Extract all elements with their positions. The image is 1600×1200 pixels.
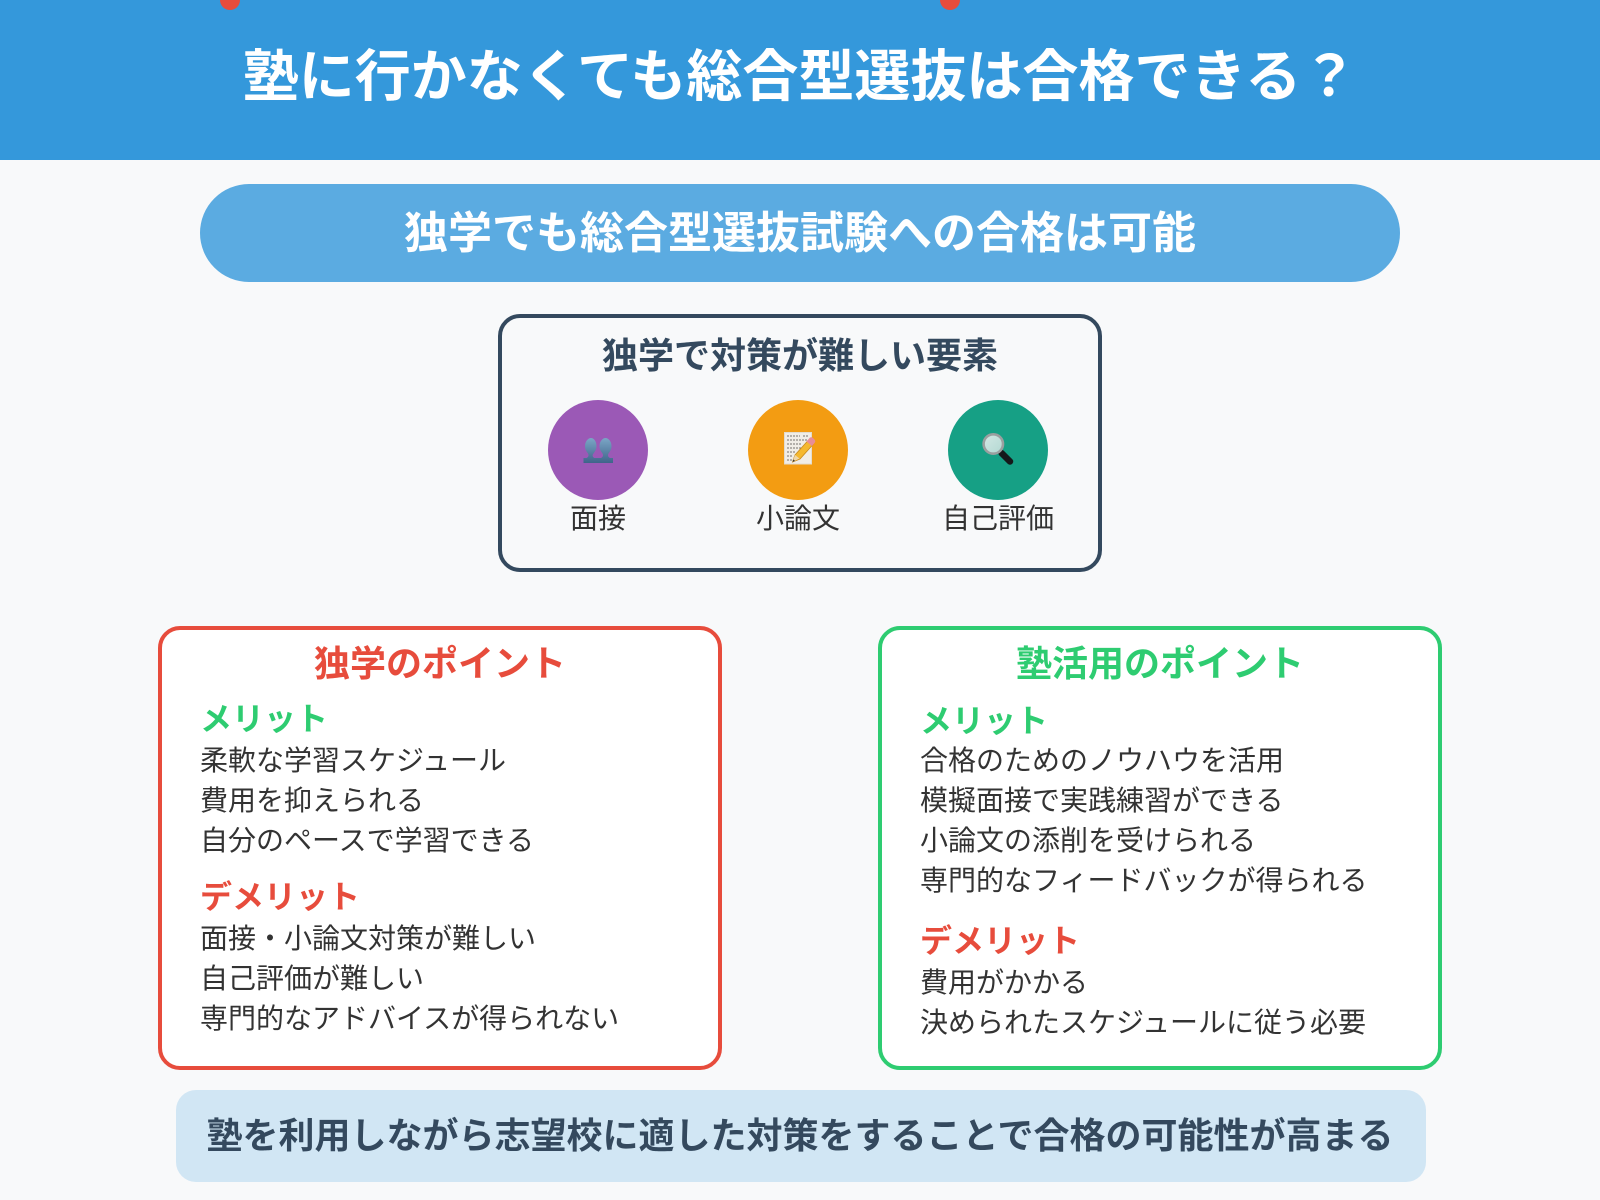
demerits list: 決められたスケジュールに従う必要 xyxy=(920,1007,1366,1038)
icon: self-evaluation xyxy=(948,400,1048,500)
merits list: 模擬面接で実践練習ができる xyxy=(920,785,1283,816)
header banner xyxy=(0,0,1600,160)
demerits list: 専門的なアドバイスが得られない xyxy=(200,1003,619,1034)
merits heading: メリット xyxy=(200,701,328,737)
panel: elements difficult to self-study xyxy=(500,316,1100,570)
merits list: 小論文の添削を受けられる xyxy=(920,825,1256,856)
merits heading: メリット xyxy=(920,703,1048,739)
title: 塾に行かなくても総合型選抜は合格できる？ xyxy=(243,45,1357,108)
merits list: 自分のペースで学習できる xyxy=(200,825,534,856)
subtitle pill: 独学でも総合型選抜試験への合格は可能 xyxy=(404,209,1196,258)
demerits list xyxy=(200,923,619,1034)
label: essay: 小論文 xyxy=(756,503,840,534)
conclusion band: 塾を利用しながら志望校に適した対策をすることで合格の可能性が高まる xyxy=(207,1115,1393,1156)
merits list xyxy=(200,745,534,856)
panel heading: 独学で対策が難しい要素 xyxy=(602,335,998,376)
subtitle pill xyxy=(200,184,1400,282)
label: interview: 面接 xyxy=(570,503,626,534)
merits list: 費用を抑えられる xyxy=(200,785,424,816)
merits list xyxy=(920,745,1367,896)
panel heading: 独学のポイント xyxy=(314,643,566,684)
panel: cram school points xyxy=(880,628,1440,1068)
conclusion band xyxy=(176,1090,1426,1182)
demerits list: 費用がかかる xyxy=(920,967,1088,998)
demerits list xyxy=(920,967,1366,1038)
demerits list: 面接・小論文対策が難しい xyxy=(200,923,536,954)
merits list: 合格のためのノウハウを活用 xyxy=(920,745,1284,776)
icon: interview xyxy=(548,400,648,500)
demerits heading: デメリット xyxy=(200,879,360,915)
panel heading: 塾活用のポイント xyxy=(1016,643,1304,684)
merits list: 専門的なフィードバックが得られる xyxy=(920,865,1367,896)
demerits heading: デメリット xyxy=(920,923,1080,959)
icon: essay xyxy=(748,400,848,500)
panel: self-study points xyxy=(160,628,720,1068)
merits list: 柔軟な学習スケジュール xyxy=(200,745,506,776)
demerits list: 自己評価が難しい xyxy=(200,963,424,994)
label: self-evaluation: 自己評価 xyxy=(942,503,1054,534)
